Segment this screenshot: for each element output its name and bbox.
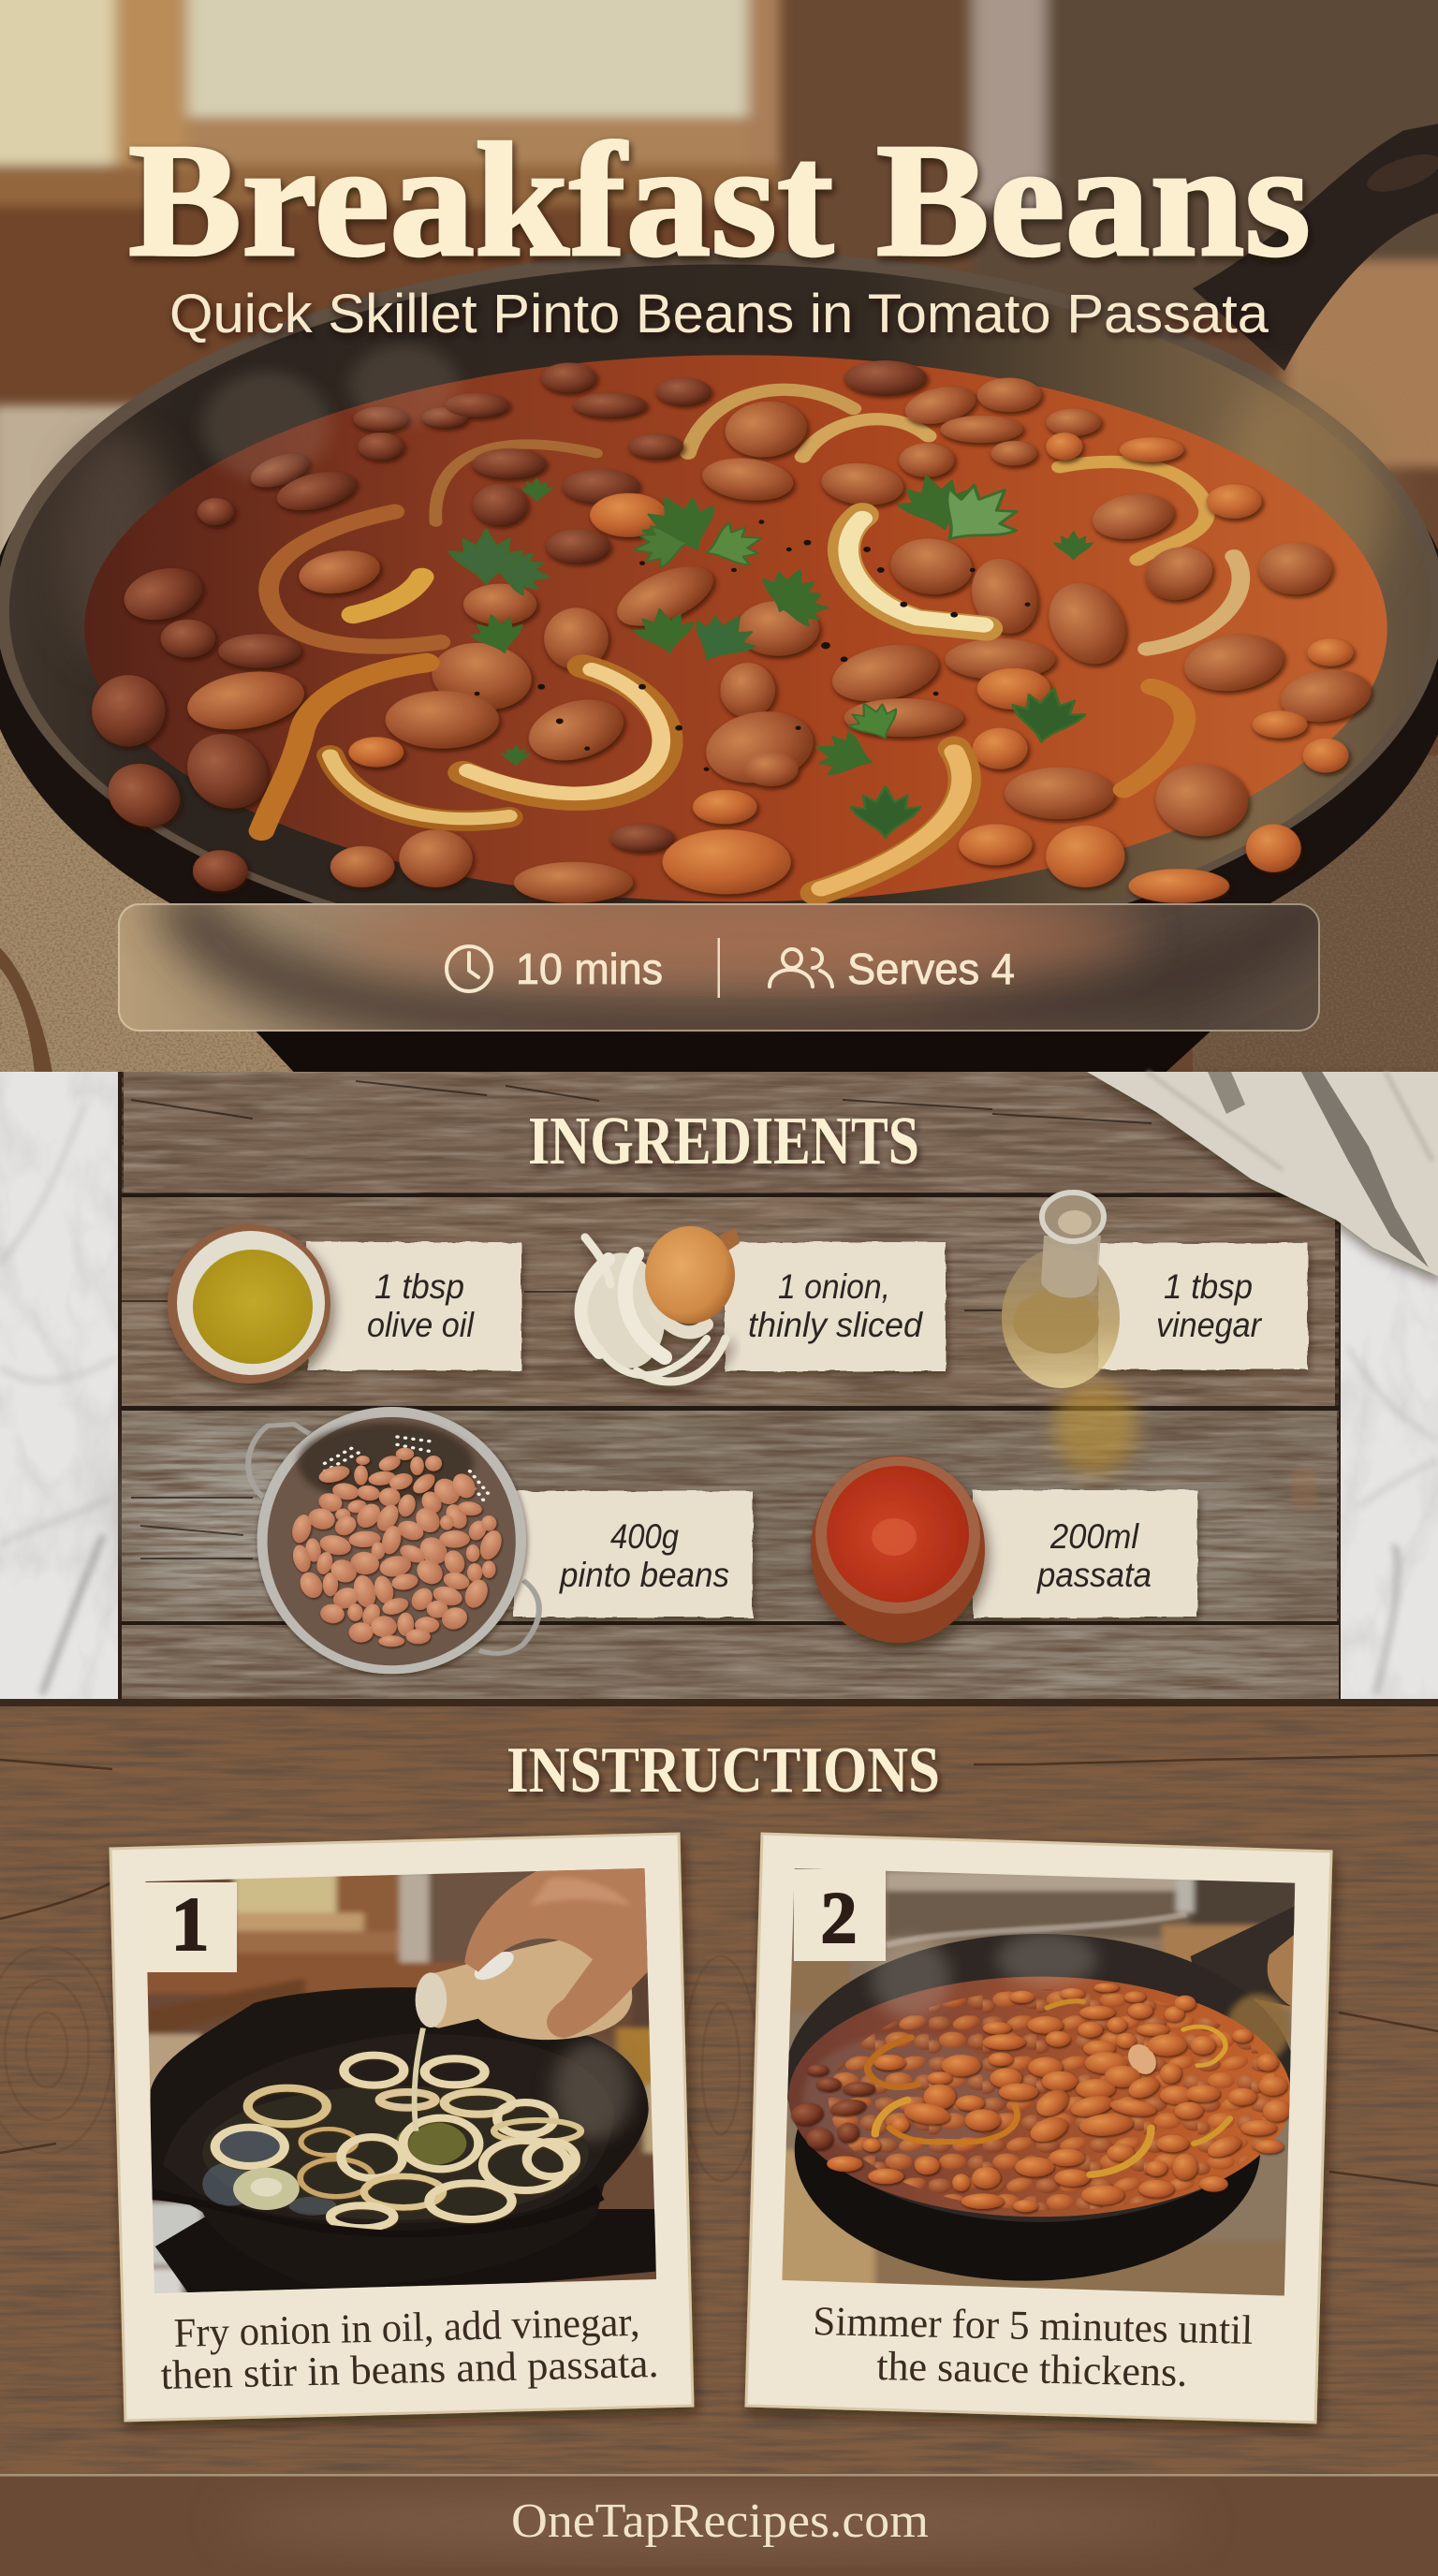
- onion slices under: [269, 389, 1207, 647]
- label text: 400g: [610, 1517, 679, 1556]
- black pepper: [475, 520, 1031, 771]
- label text: 1 onion,: [778, 1267, 890, 1306]
- panel: instructions: [0, 1699, 1438, 2476]
- icon: clock: [447, 946, 492, 991]
- time and servings bar: [118, 889, 1329, 1032]
- vinegar stream: [415, 2028, 423, 2131]
- ingredient: passata: [811, 1456, 1197, 1643]
- paper card: [746, 1834, 1331, 2422]
- photo: pouring vinegar over onions: [136, 1863, 664, 2300]
- caption 2: Simmer for 5 minutes until: [813, 2298, 1254, 2353]
- ingredient: pinto beans: [248, 1407, 753, 1674]
- paper label: [973, 1490, 1197, 1617]
- icon: people: [770, 949, 832, 987]
- skillet: [151, 1987, 649, 2287]
- steam: [202, 344, 459, 481]
- step badge 1: 1: [170, 1881, 210, 1967]
- paper label: [514, 1491, 753, 1617]
- steam: [872, 1931, 1097, 2019]
- caption 1: then stir in beans and passata.: [160, 2340, 659, 2398]
- cook time: 10 mins: [516, 944, 663, 993]
- footer: [0, 2474, 1438, 2576]
- stove: [155, 2209, 655, 2296]
- paper label: [725, 1242, 946, 1371]
- ingredient: onion: thinly sliced: [748, 1306, 923, 1344]
- icon: vinegar bottle: [1002, 1193, 1120, 1388]
- label text: 200ml: [1049, 1517, 1140, 1556]
- beans: [92, 360, 1379, 903]
- oil: [202, 2086, 589, 2220]
- table and burlap cloth: [0, 405, 1438, 1076]
- caption 1: Fry onion in oil, add vinegar,: [173, 2299, 640, 2356]
- servings: Serves 4: [847, 944, 1015, 993]
- skillet handle: [1191, 1907, 1295, 2006]
- photo beans: [789, 1983, 1290, 2212]
- marble counter: [0, 1072, 1438, 1699]
- icon: onion and slices: [579, 1226, 740, 1382]
- paper label: [1098, 1243, 1308, 1369]
- panel: ingredients: [0, 1072, 1438, 1699]
- onion rings: [215, 2056, 580, 2228]
- wood background: [0, 1699, 1438, 2476]
- window: [0, 0, 787, 215]
- caption 1: [160, 2299, 659, 2398]
- paper card: [110, 1834, 693, 2421]
- ingredient: onion: [579, 1226, 946, 1382]
- sauce: [788, 1977, 1292, 2217]
- heading: INGREDIENTS: [528, 1103, 919, 1178]
- step card 1: [110, 1834, 693, 2421]
- ingredient: olive oil: olive oil: [367, 1306, 476, 1344]
- wooden boards: [118, 1072, 1341, 1699]
- icon: colander with beans: [248, 1407, 539, 1674]
- hero scene: [0, 0, 1438, 1076]
- caption 2: [813, 2298, 1254, 2395]
- subtitle: Quick Skillet Pinto Beans in Tomato Passata: [169, 284, 1269, 344]
- vinegar bottle: [417, 1936, 632, 2040]
- website: OneTapRecipes.com: [511, 2495, 929, 2548]
- skillet front lip: [152, 2184, 605, 2237]
- ingredient: vinegar: vinegar: [1156, 1306, 1263, 1344]
- label text: 1 tbsp: [374, 1267, 464, 1306]
- onion slices over: [261, 515, 1240, 893]
- step card 2: [746, 1834, 1331, 2422]
- caption 2: the sauce thickens.: [876, 2343, 1188, 2395]
- ingredient: vinegar: [1002, 1193, 1308, 1388]
- sauce: [84, 355, 1387, 901]
- ingredient: olive oil: [168, 1224, 521, 1383]
- back wall: [785, 0, 1438, 467]
- background: [778, 1863, 1301, 2300]
- icon: oil bowl: [168, 1224, 330, 1383]
- icon: passata jar: [811, 1456, 985, 1643]
- label text: 1 tbsp: [1164, 1267, 1253, 1306]
- onion strips: [868, 2001, 1230, 2174]
- photo: simmering beans: [778, 1863, 1301, 2300]
- ingredient: pinto beans: pinto beans: [559, 1556, 729, 1594]
- step badge 2: [794, 1869, 886, 1961]
- ingredient: passata: passata: [1036, 1556, 1152, 1594]
- parsley: [449, 469, 1093, 838]
- skillet handle: [1193, 124, 1438, 371]
- background: [136, 1863, 664, 2300]
- divider: [717, 938, 720, 998]
- paper label: [307, 1242, 521, 1370]
- hand: [464, 1868, 648, 2038]
- step badge 1: [145, 1881, 237, 1972]
- linen towel: [1087, 1072, 1438, 1276]
- heading: INSTRUCTIONS: [506, 1734, 940, 1807]
- colander beans: [289, 1448, 506, 1647]
- dense bean layer: [829, 1989, 1280, 2211]
- title: Breakfast Beans: [128, 110, 1311, 290]
- skillet: [0, 251, 1438, 1076]
- skillet: [795, 2019, 1260, 2281]
- panel: hero photo: [0, 0, 1438, 1076]
- step badge 2: 2: [820, 1877, 858, 1958]
